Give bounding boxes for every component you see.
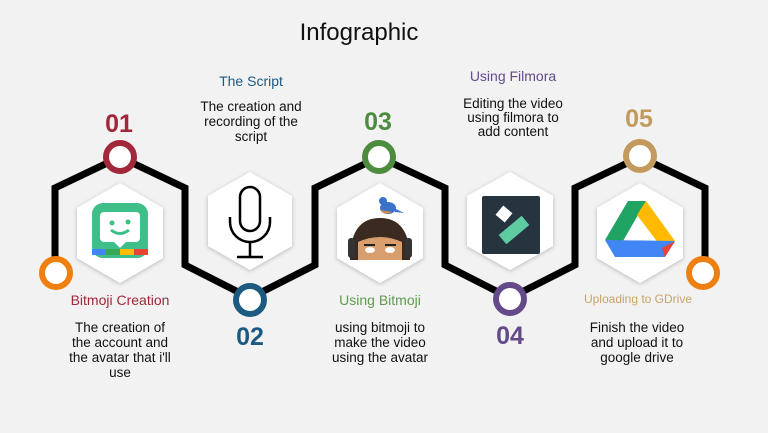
circle node: 05 [626, 142, 654, 170]
step 02 description: recording of the [204, 114, 298, 129]
step 05 description: google drive [600, 350, 674, 365]
step 03 heading: Using Bitmoji [339, 292, 421, 308]
step 02 number: 02 [236, 323, 264, 351]
step 05 number: 05 [625, 105, 653, 133]
step 01 description: the account and [72, 335, 168, 350]
circle node: end orange [689, 259, 717, 287]
circle node: 01 [106, 143, 134, 171]
step 01 number: 01 [105, 110, 133, 138]
icon: bitmoji [92, 203, 148, 258]
step 01 description: The creation of [75, 320, 165, 335]
step 04 description: using filmora to [467, 110, 559, 125]
step 03 description: using the avatar [332, 350, 429, 365]
step 01 description: use [109, 365, 131, 380]
circle node: 02 [236, 286, 264, 314]
step 03 description: make the video [334, 335, 426, 350]
step 04 number: 04 [496, 322, 524, 350]
hexagon 4: filmora [467, 172, 553, 270]
hexagon 1: bitmoji logo [77, 183, 163, 283]
icon: avatar with bird [348, 197, 412, 260]
zigzag connector line [55, 157, 705, 298]
step 05 heading: Uploading to GDrive [584, 292, 692, 306]
step 02 heading: The Script [219, 73, 283, 89]
hexagon 5: google drive [597, 183, 683, 283]
step 05 description: and upload it to [591, 335, 683, 350]
hexagon 3: bitmoji avatar [337, 183, 423, 283]
step 03 description: using bitmoji to [335, 320, 425, 335]
circle node: 04 [496, 285, 524, 313]
icon: filmora [482, 196, 540, 254]
hexagon 2: microphone [208, 172, 292, 270]
step 02 description: The creation and [200, 99, 302, 114]
step 04 heading: Using Filmora [470, 68, 556, 84]
step 04 description: add content [478, 124, 549, 139]
step 01 description: the avatar that i'll [69, 350, 171, 365]
title: Infographic [300, 19, 418, 46]
step 01 heading: Bitmoji Creation [71, 292, 169, 308]
icon: microphone [230, 187, 270, 257]
icon: google drive [605, 201, 675, 257]
circle node: 03 [365, 143, 393, 171]
step 02 description: script [235, 129, 267, 144]
step 05 description: Finish the video [590, 320, 684, 335]
step 04 description: Editing the video [463, 96, 563, 111]
step 03 number: 03 [364, 108, 392, 136]
circle node: start orange [42, 259, 70, 287]
